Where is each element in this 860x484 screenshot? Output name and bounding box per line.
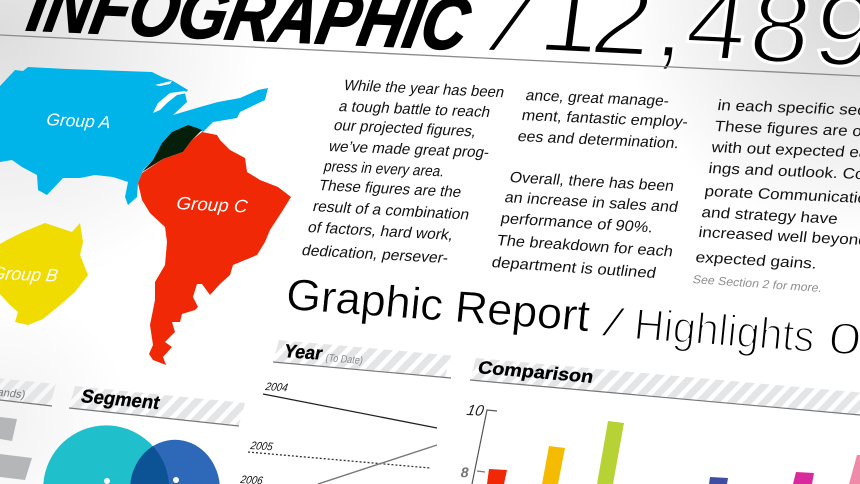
section header: thousands <box>0 375 56 406</box>
map region: dark overlap <box>142 125 202 172</box>
text column 1: dedication, persever- <box>300 242 450 267</box>
text column 2: ance, great manage- <box>524 87 671 110</box>
text column 3: expected gains. <box>694 249 818 273</box>
text column 1: result of a combination <box>311 198 471 224</box>
text column 1: a tough battle to reach <box>337 98 492 121</box>
title rule <box>0 35 860 76</box>
text column 1: press in every area. <box>322 158 446 180</box>
bar chart: comparison: 8 <box>459 464 470 480</box>
text column 2: ment, fantastic employ- <box>520 107 690 131</box>
map <box>0 67 291 365</box>
section header: Year <box>273 340 451 378</box>
text column 1: These figures are the <box>317 177 463 201</box>
text column 1: our projected figures, <box>332 117 478 140</box>
map region: Group B <box>0 223 88 325</box>
text column 1: we’ve made great prog- <box>326 138 491 161</box>
text column 1: of factors, hard work, <box>306 219 455 244</box>
text column 2: Overall, there has been <box>508 169 676 195</box>
section header: Segment <box>69 385 245 426</box>
text column 3 <box>694 97 860 273</box>
text column 2: ees and determination. <box>516 128 681 152</box>
bar chart: comparison: 10 <box>465 402 486 420</box>
gray bar chart <box>0 417 32 480</box>
section header: Comparison: Comparison <box>476 357 595 387</box>
heading slash: / <box>598 302 628 344</box>
line chart: year: 2004 <box>264 381 289 394</box>
text column 2 <box>490 87 690 282</box>
footnote: See Section 2 for more. <box>691 273 823 295</box>
label: Group A: Group A <box>46 110 111 132</box>
line chart: year: 2005 <box>249 440 275 453</box>
text column 2: department is outlined <box>490 254 658 282</box>
bar chart: comparison <box>459 402 860 484</box>
text column 2: performance of 90%. <box>499 210 655 236</box>
venn diagram <box>43 425 220 484</box>
map lake: Lake Superior <box>155 81 172 86</box>
section header: Comparison <box>470 357 860 416</box>
text column 2: The breakdown for each <box>495 232 675 260</box>
text column 1: While the year has been <box>342 77 506 101</box>
map region: Group C <box>138 132 291 365</box>
map region: Group A <box>0 67 268 205</box>
section header: Segment: Segment <box>79 385 163 413</box>
line chart: year <box>239 381 437 484</box>
section header: Year: Year <box>282 340 325 364</box>
text column 3: and strategy have <box>700 204 839 228</box>
section header: Year: (To Date) <box>324 352 364 367</box>
text column 2: an increase in sales and <box>503 189 680 216</box>
map lake: Lake Michigan <box>153 91 187 113</box>
heading: Graphic Report: Graphic Report <box>284 270 592 341</box>
label: Group C: Group C <box>176 193 250 217</box>
text column 1 <box>300 77 506 267</box>
heading: Highlights: Highlights <box>632 300 817 362</box>
